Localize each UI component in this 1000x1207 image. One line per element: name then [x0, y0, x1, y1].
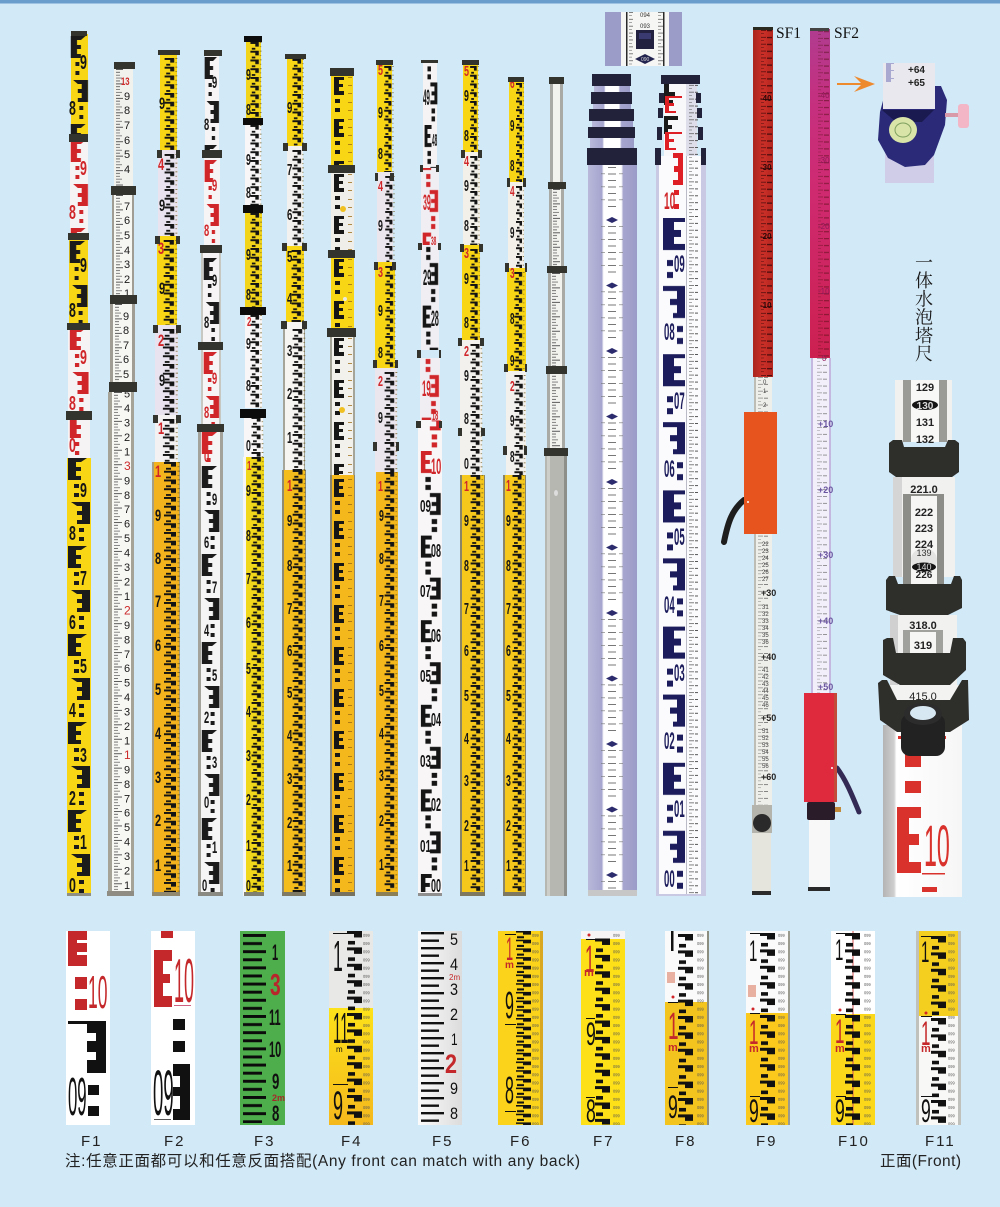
close-up staff with bubble clamp: 221.0 — [910, 484, 938, 496]
swatch F11: yellow over white ladder face: 1 — [921, 937, 929, 970]
staff 14: white and navy E-pattern staff: 09 — [674, 250, 685, 277]
swatch F5: white black-bar face: 5 — [450, 931, 458, 949]
close-up staff with bubble clamp: 132 — [916, 434, 934, 446]
staff 8: yellow and white ladder — [373, 60, 399, 896]
swatch F9: white over gold ladder face: m — [749, 1043, 759, 1055]
staff 14: white and navy E-pattern staff — [655, 75, 706, 896]
staff 11: yellow and white with gold base — [503, 74, 527, 896]
swatch labels F1 to F11: F11 — [925, 1133, 956, 1150]
top border bar — [0, 0, 1000, 4]
staff 10: yellow and white with gold base: 1 — [464, 856, 469, 875]
vertical caption: integrated bubble tower staff: 一体水泡塔尺 — [915, 253, 933, 364]
SF1 staff: red top with orange clamp and handle: 46 — [762, 703, 769, 709]
swatch F7: yellow ladder face with white top: 1 — [585, 938, 595, 981]
SF1 staff: red top with orange clamp and handle: -30 — [760, 163, 772, 172]
close-up staff with bubble clamp: 318.0 — [909, 620, 937, 632]
swatch F4: grey over yellow ladder face: m — [336, 1045, 343, 1054]
swatch F6: yellow fine ladder face: m — [505, 960, 514, 971]
staff 5: yellow and white with black clamps: 9898989809876543210 — [246, 65, 251, 895]
staff 4: white E-pattern with grey edges: 9997531 — [212, 73, 217, 857]
SF1 staff: red top with orange clamp and handle: 41 — [762, 668, 769, 674]
SF1 staff: red top with orange clamp and handle: 36 — [762, 640, 769, 646]
close-up staff with bubble clamp: 140 — [916, 562, 932, 572]
swatch labels F1 to F11: F10 — [838, 1133, 870, 1150]
SF1 staff: red top with orange clamp and handle: 54 — [762, 750, 769, 756]
swatch F8: white over gold ladder face — [665, 931, 709, 1125]
close-up staff with bubble clamp: 223 — [915, 523, 933, 535]
swatch F11: yellow over white ladder face: m — [921, 1043, 931, 1055]
swatch F7: yellow ladder face with white top: 8 — [586, 1095, 596, 1129]
close-up staff with bubble clamp — [878, 380, 969, 897]
SF1 staff: red top with orange clamp and handle: +30 — [761, 588, 776, 598]
inset: close-up of staff scale 094 093: 090 — [641, 57, 650, 63]
inset: integrated bubble level: +65 — [908, 78, 925, 89]
staff 9: white face with red and black E and tall digits: 04 — [431, 711, 441, 731]
SF2 staff: magenta top with red clamp and handle: +50 — [818, 682, 833, 692]
inset: close-up of staff scale 094 093: 094 — [640, 13, 651, 19]
staff 2: silver with white scale: 12345678912345678912345678912345 — [124, 388, 130, 892]
SF1 staff: red top with orange clamp and handle: 42 — [762, 675, 769, 681]
staff 14: white and navy E-pattern staff: 08 — [664, 318, 675, 345]
staff 1: yellow and red E-pattern — [66, 31, 92, 897]
swatch F3: green face: 10 — [269, 1037, 281, 1062]
swatch F5: white black-bar face: 2 — [445, 1050, 457, 1080]
swatch F1: white red and black E face — [66, 931, 110, 1127]
swatch F2: white red and black E face: 09 — [153, 1057, 174, 1129]
staff 9: white face with red and black E and tall digits: 07 — [420, 582, 431, 602]
SF2 staff: magenta top with red clamp and handle — [804, 28, 859, 891]
swatch labels F1 to F11: F2 — [164, 1133, 186, 1150]
staff 14: white and navy E-pattern staff: 03 — [674, 659, 685, 686]
staff 3: yellow, lilac and orange ladder scale: 1 — [155, 463, 161, 482]
inset: integrated bubble level: +64 — [908, 65, 925, 76]
SF2 staff: magenta top with red clamp and handle: +20 — [818, 485, 833, 495]
swatch F8: white over gold ladder face: 9 — [668, 1091, 678, 1125]
staff 9: white face with red and black E and tall digits: 03 — [420, 752, 431, 772]
SF2 staff: magenta top with red clamp and handle: 0 — [822, 354, 827, 363]
SF1 staff: red top with orange clamp and handle: 34 — [762, 626, 769, 632]
staff 1: yellow and red E-pattern: 880 — [69, 201, 76, 457]
staff 6: yellow and white with orange base: 1 — [287, 476, 292, 495]
swatch F9: white over gold ladder face: 9 — [749, 1095, 759, 1129]
swatch F10: white over yellow ladder face: 1 — [835, 935, 843, 968]
staff 5: yellow and white with black clamps — [240, 36, 266, 896]
swatch F3: green face: 3 — [270, 969, 281, 1002]
SF2 staff: magenta top with red clamp and handle: +30 — [818, 550, 833, 560]
staff 4: white E-pattern with grey edges: 880 — [204, 221, 209, 466]
SF1 staff: red top with orange clamp and handle: 22 — [762, 542, 769, 548]
swatch F9: white over gold ladder face: 1 — [749, 1014, 758, 1052]
staff 11: yellow and white with gold base: 1 — [506, 476, 511, 495]
swatch F4: grey over yellow ladder face: 11 — [333, 1003, 349, 1052]
SF1 label: SF1 — [776, 25, 801, 42]
staff 8: yellow and white ladder: 987654321 — [379, 506, 384, 874]
front label: 正面(Front) — [880, 1153, 961, 1170]
staff 9: white face with red and black E and tall digits: 06 — [431, 627, 441, 647]
staff 11: yellow and white with gold base: 987654321 — [506, 511, 511, 875]
swatch labels F1 to F11: F8 — [675, 1133, 697, 1150]
SF1 staff: red top with orange clamp and handle: 43 — [762, 682, 769, 688]
staff 14: white and navy E-pattern staff: 10 — [664, 187, 675, 214]
SF1 staff: red top with orange clamp and handle: 35 — [762, 633, 769, 639]
swatch F2: white red and black E face — [151, 931, 195, 1129]
swatch F3: green face: 2m — [272, 1093, 285, 1103]
staff 2: silver with white scale: 9876547654321 — [124, 91, 130, 300]
swatch labels F1 to F11: F5 — [432, 1133, 454, 1150]
staff 14: white and navy E-pattern staff: 02 — [664, 727, 675, 754]
SF1 staff: red top with orange clamp and handle: 1 — [763, 389, 767, 395]
staff 9: white face with red and black E and tall digits: 18 — [432, 408, 438, 424]
swatch labels F1 to F11: F3 — [254, 1133, 276, 1150]
SF1 staff: red top with orange clamp and handle: +50 — [761, 713, 776, 723]
staff 9: white face with red and black E and tall digits: 38 — [431, 234, 436, 248]
arrow pointing to bubble level — [837, 76, 875, 92]
SF1 staff: red top with orange clamp and handle: 27 — [762, 577, 769, 583]
staff 9: white face with red and black E and tall digits: 29 — [423, 266, 431, 290]
staff 3: yellow, lilac and orange ladder scale: 9999 — [159, 95, 165, 391]
SF2 staff: magenta top with red clamp and handle: +40 — [818, 616, 833, 626]
swatch labels F1 to F11 — [81, 1133, 956, 1150]
staff 6: yellow and white with orange base: 97654321987654321 — [287, 98, 293, 875]
staff 1: yellow and red E-pattern: 8886420 — [69, 97, 76, 897]
SF1 staff: red top with orange clamp and handle: 0 — [763, 380, 767, 386]
SF1 staff: red top with orange clamp and handle: 45 — [762, 696, 769, 702]
swatch F10: white over yellow ladder face: 1 — [835, 1013, 844, 1051]
staff 13: large lavender staff with fine centre scale — [587, 74, 637, 896]
staff 11: yellow and white with gold base: 6432 — [510, 74, 515, 395]
swatch F1: white red and black E face: 10 — [88, 968, 107, 1019]
swatch F4: grey over yellow ladder face: 9 — [333, 1083, 343, 1128]
SF1 staff: red top with orange clamp and handle: +40 — [761, 652, 776, 662]
inset: close-up of staff scale 094 093 — [605, 12, 682, 66]
close-up staff with bubble clamp: 131 — [916, 417, 934, 429]
swatch F3: green face: 11 — [269, 1005, 281, 1030]
swatch F7: yellow ladder face with white top: m — [584, 967, 594, 979]
swatch F10: white over yellow ladder face — [831, 931, 875, 1129]
inset: integrated bubble level — [878, 63, 969, 183]
staff 2: silver with white scale: 13 — [121, 76, 130, 88]
staff 9: white face with red and black E and tall digits: 08 — [431, 542, 441, 562]
staff 10: yellow and white with gold base: 9898989 — [464, 86, 469, 385]
staff 3: yellow, lilac and orange ladder scale — [152, 50, 181, 896]
swatch F5: white black-bar face: 9 — [450, 1080, 458, 1098]
close-up staff with bubble clamp: 139 — [916, 548, 932, 558]
staff 4: white E-pattern with grey edges: 886420 — [204, 115, 209, 812]
SF1 staff: red top with orange clamp and handle — [724, 27, 777, 895]
close-up staff with bubble clamp: 319 — [914, 640, 932, 652]
swatch F2: white red and black E face: 10 — [174, 946, 194, 1016]
inset: close-up of staff scale 094 093: 093 — [640, 24, 651, 30]
close-up staff with bubble clamp: 226 — [916, 570, 933, 581]
swatch F6: yellow fine ladder face — [498, 931, 543, 1125]
staff 10: yellow and white with gold base: 8098765432 — [464, 409, 469, 835]
SF2 label: SF2 — [834, 25, 859, 42]
SF1 staff: red top with orange clamp and handle: 32 — [762, 612, 769, 618]
close-up staff with bubble clamp: 130 — [917, 401, 934, 412]
SF2 staff: magenta top with red clamp and handle: -30 — [818, 156, 830, 165]
swatch F6: yellow fine ladder face: 1 — [506, 932, 513, 968]
SF1 staff: red top with orange clamp and handle: 31 — [762, 605, 769, 611]
swatch F10: white over yellow ladder face: 9 — [835, 1095, 845, 1129]
swatch F5: white black-bar face — [418, 931, 462, 1125]
staff 2: silver with white scale: 123 — [124, 459, 131, 762]
swatch F9: white over gold ladder face: 1 — [749, 936, 757, 969]
swatch F8: white over gold ladder face: m — [668, 1042, 678, 1054]
swatch F11: yellow over white ladder face: 1 — [921, 1015, 930, 1053]
staff 4: white E-pattern with grey edges: 99 — [212, 176, 217, 388]
SF1 staff: red top with orange clamp and handle: -20 — [760, 232, 772, 241]
swatch F10: white over yellow ladder face: m — [835, 1043, 845, 1055]
SF2 staff: magenta top with red clamp and handle: -10 — [818, 287, 830, 296]
close-up staff with bubble clamp: 10 — [924, 815, 950, 879]
swatch F7: yellow ladder face with white top — [581, 931, 625, 1129]
swatch F11: yellow over white ladder face — [916, 931, 961, 1129]
footnote: any front can match with any back: 注:任意正面都可以和任意反面搭配(Any front can match with any back) — [65, 1151, 580, 1170]
staff 9: white face with red and black E and tall digits: 49 — [423, 86, 430, 110]
SF1 staff: red top with orange clamp and handle: 44 — [762, 689, 769, 695]
SF1 staff: red top with orange clamp and handle: 33 — [762, 619, 769, 625]
swatch F5: white black-bar face: 2m — [449, 973, 460, 982]
staff 9: white face with red and black E and tall digits: 10 — [431, 454, 441, 479]
swatch F3: green face: 9 — [272, 1070, 279, 1094]
staff 10: yellow and white with gold base — [458, 60, 485, 896]
staff 9: white face with red and black E and tall digits — [416, 60, 442, 897]
staff 14: white and navy E-pattern staff: 06 — [664, 455, 675, 482]
SF1 staff: red top with orange clamp and handle: 56 — [762, 764, 769, 770]
staff 2: silver with white scale — [107, 62, 137, 896]
SF1 staff: red top with orange clamp and handle: -10 — [760, 301, 772, 310]
swatch F11: yellow over white ladder face: 9 — [921, 1095, 931, 1129]
staff 9: white face with red and black E and tall digits: 00 — [431, 877, 441, 897]
swatch F5: white black-bar face: 1 — [451, 1031, 458, 1050]
staff 9: white face with red and black E and tall digits: 19 — [422, 376, 431, 401]
SF1 staff: red top with orange clamp and handle: 55 — [762, 757, 769, 763]
SF1 staff: red top with orange clamp and handle: -40 — [760, 94, 772, 103]
swatch labels F1 to F11: F4 — [341, 1133, 363, 1150]
close-up staff with bubble clamp: 129 — [916, 382, 934, 394]
staff 12: plain silver back — [544, 77, 568, 896]
SF1 staff: red top with orange clamp and handle: 24 — [762, 556, 769, 562]
swatch labels F1 to F11: F6 — [510, 1133, 532, 1150]
swatch F4: grey over yellow ladder face — [329, 931, 373, 1128]
swatch F6: yellow fine ladder face: 8 — [505, 1070, 514, 1112]
swatch F7: yellow ladder face with white top: 9 — [586, 1018, 596, 1052]
staff 6: yellow and white with orange base — [281, 54, 307, 896]
staff 4: white E-pattern with grey edges — [197, 50, 224, 896]
swatch labels F1 to F11: F9 — [756, 1133, 778, 1150]
swatch F5: white black-bar face: 2 — [450, 1006, 458, 1024]
staff 4: white E-pattern with grey edges: 0 — [202, 876, 207, 895]
staff 3: yellow, lilac and orange ladder scale: 4321 — [158, 156, 164, 439]
staff 9: white face with red and black E and tall digits: 02 — [431, 796, 441, 816]
staff 11: yellow and white with gold base: 9898998 — [510, 117, 514, 466]
staff 14: white and navy E-pattern staff: 05 — [674, 523, 685, 550]
staff 9: white face with red and black E and tall digits: 09 — [420, 497, 431, 517]
swatch F1: white red and black E face: 09 — [68, 1068, 87, 1127]
SF1 staff: red top with orange clamp and handle: +60 — [761, 772, 776, 782]
staff 14: white and navy E-pattern staff: 07 — [674, 387, 685, 414]
SF1 staff: red top with orange clamp and handle: 26 — [762, 570, 769, 576]
swatch labels F1 to F11: F7 — [593, 1133, 615, 1150]
close-up staff with bubble clamp: 222 — [915, 507, 933, 519]
staff 5: yellow and white with black clamps: 21 — [247, 315, 251, 474]
SF1 staff: red top with orange clamp and handle: 25 — [762, 563, 769, 569]
staff 9: white face with red and black E and tall digits: 48 — [432, 130, 437, 150]
close-up staff with bubble clamp: 415.0 — [909, 691, 937, 703]
staff 1: yellow and red E-pattern: 9997531 — [80, 51, 87, 854]
swatch F5: white black-bar face: 8 — [450, 1105, 458, 1123]
swatch F5: white black-bar face: 3 — [450, 981, 458, 999]
swatch F3: green face: 1 — [272, 940, 278, 965]
swatch F4: grey over yellow ladder face: 1 — [333, 933, 343, 982]
SF2 staff: magenta top with red clamp and handle: -20 — [818, 222, 830, 231]
staff 10: yellow and white with gold base: 54321 — [464, 63, 469, 495]
swatch F3: green face — [240, 931, 285, 1126]
staff 1: yellow and red E-pattern: 99 — [80, 157, 87, 369]
SF2 staff: magenta top with red clamp and handle: +10 — [818, 419, 833, 429]
staff 9: white face with red and black E and tall digits: 01 — [420, 837, 431, 857]
SF1 staff: red top with orange clamp and handle: 2 — [763, 403, 767, 409]
swatch labels F1 to F11: F1 — [81, 1133, 103, 1150]
staff 8: yellow and white ladder: 989989 — [378, 103, 383, 427]
close-up staff with bubble clamp: 224 — [915, 539, 934, 551]
swatch F8: white over gold ladder face: 1 — [668, 1006, 679, 1048]
SF1 staff: red top with orange clamp and handle: 52 — [762, 736, 769, 742]
swatch F5: white black-bar face: 4 — [450, 956, 458, 974]
staff 3: yellow, lilac and orange ladder scale: 987654321 — [155, 507, 161, 876]
swatch F6: yellow fine ladder face: 9 — [505, 985, 514, 1027]
staff 14: white and navy E-pattern staff: 04 — [664, 591, 675, 618]
swatch F9: white over gold ladder face — [746, 931, 790, 1129]
SF1 staff: red top with orange clamp and handle: 51 — [762, 729, 769, 735]
staff 14: white and navy E-pattern staff: 01 — [674, 795, 685, 822]
SF1 staff: red top with orange clamp and handle: 23 — [762, 549, 769, 555]
staff 9: white face with red and black E and tall digits: 39 — [423, 191, 431, 215]
staff 9: white face with red and black E and tall digits: 28 — [431, 307, 439, 331]
staff 2: silver with white scale: 98765 — [123, 311, 129, 381]
staff 14: white and navy E-pattern staff: 00 — [664, 865, 675, 892]
staff 8: yellow and white ladder: 54321 — [378, 62, 383, 495]
SF1 staff: red top with orange clamp and handle: 53 — [762, 743, 769, 749]
staff 7: orange E-scale with wide clamps — [327, 68, 356, 896]
swatch F3: green face: 8 — [272, 1102, 279, 1126]
staff 9: white face with red and black E and tall digits: 05 — [420, 667, 431, 687]
SF2 staff: magenta top with red clamp and handle: -40 — [818, 91, 830, 100]
